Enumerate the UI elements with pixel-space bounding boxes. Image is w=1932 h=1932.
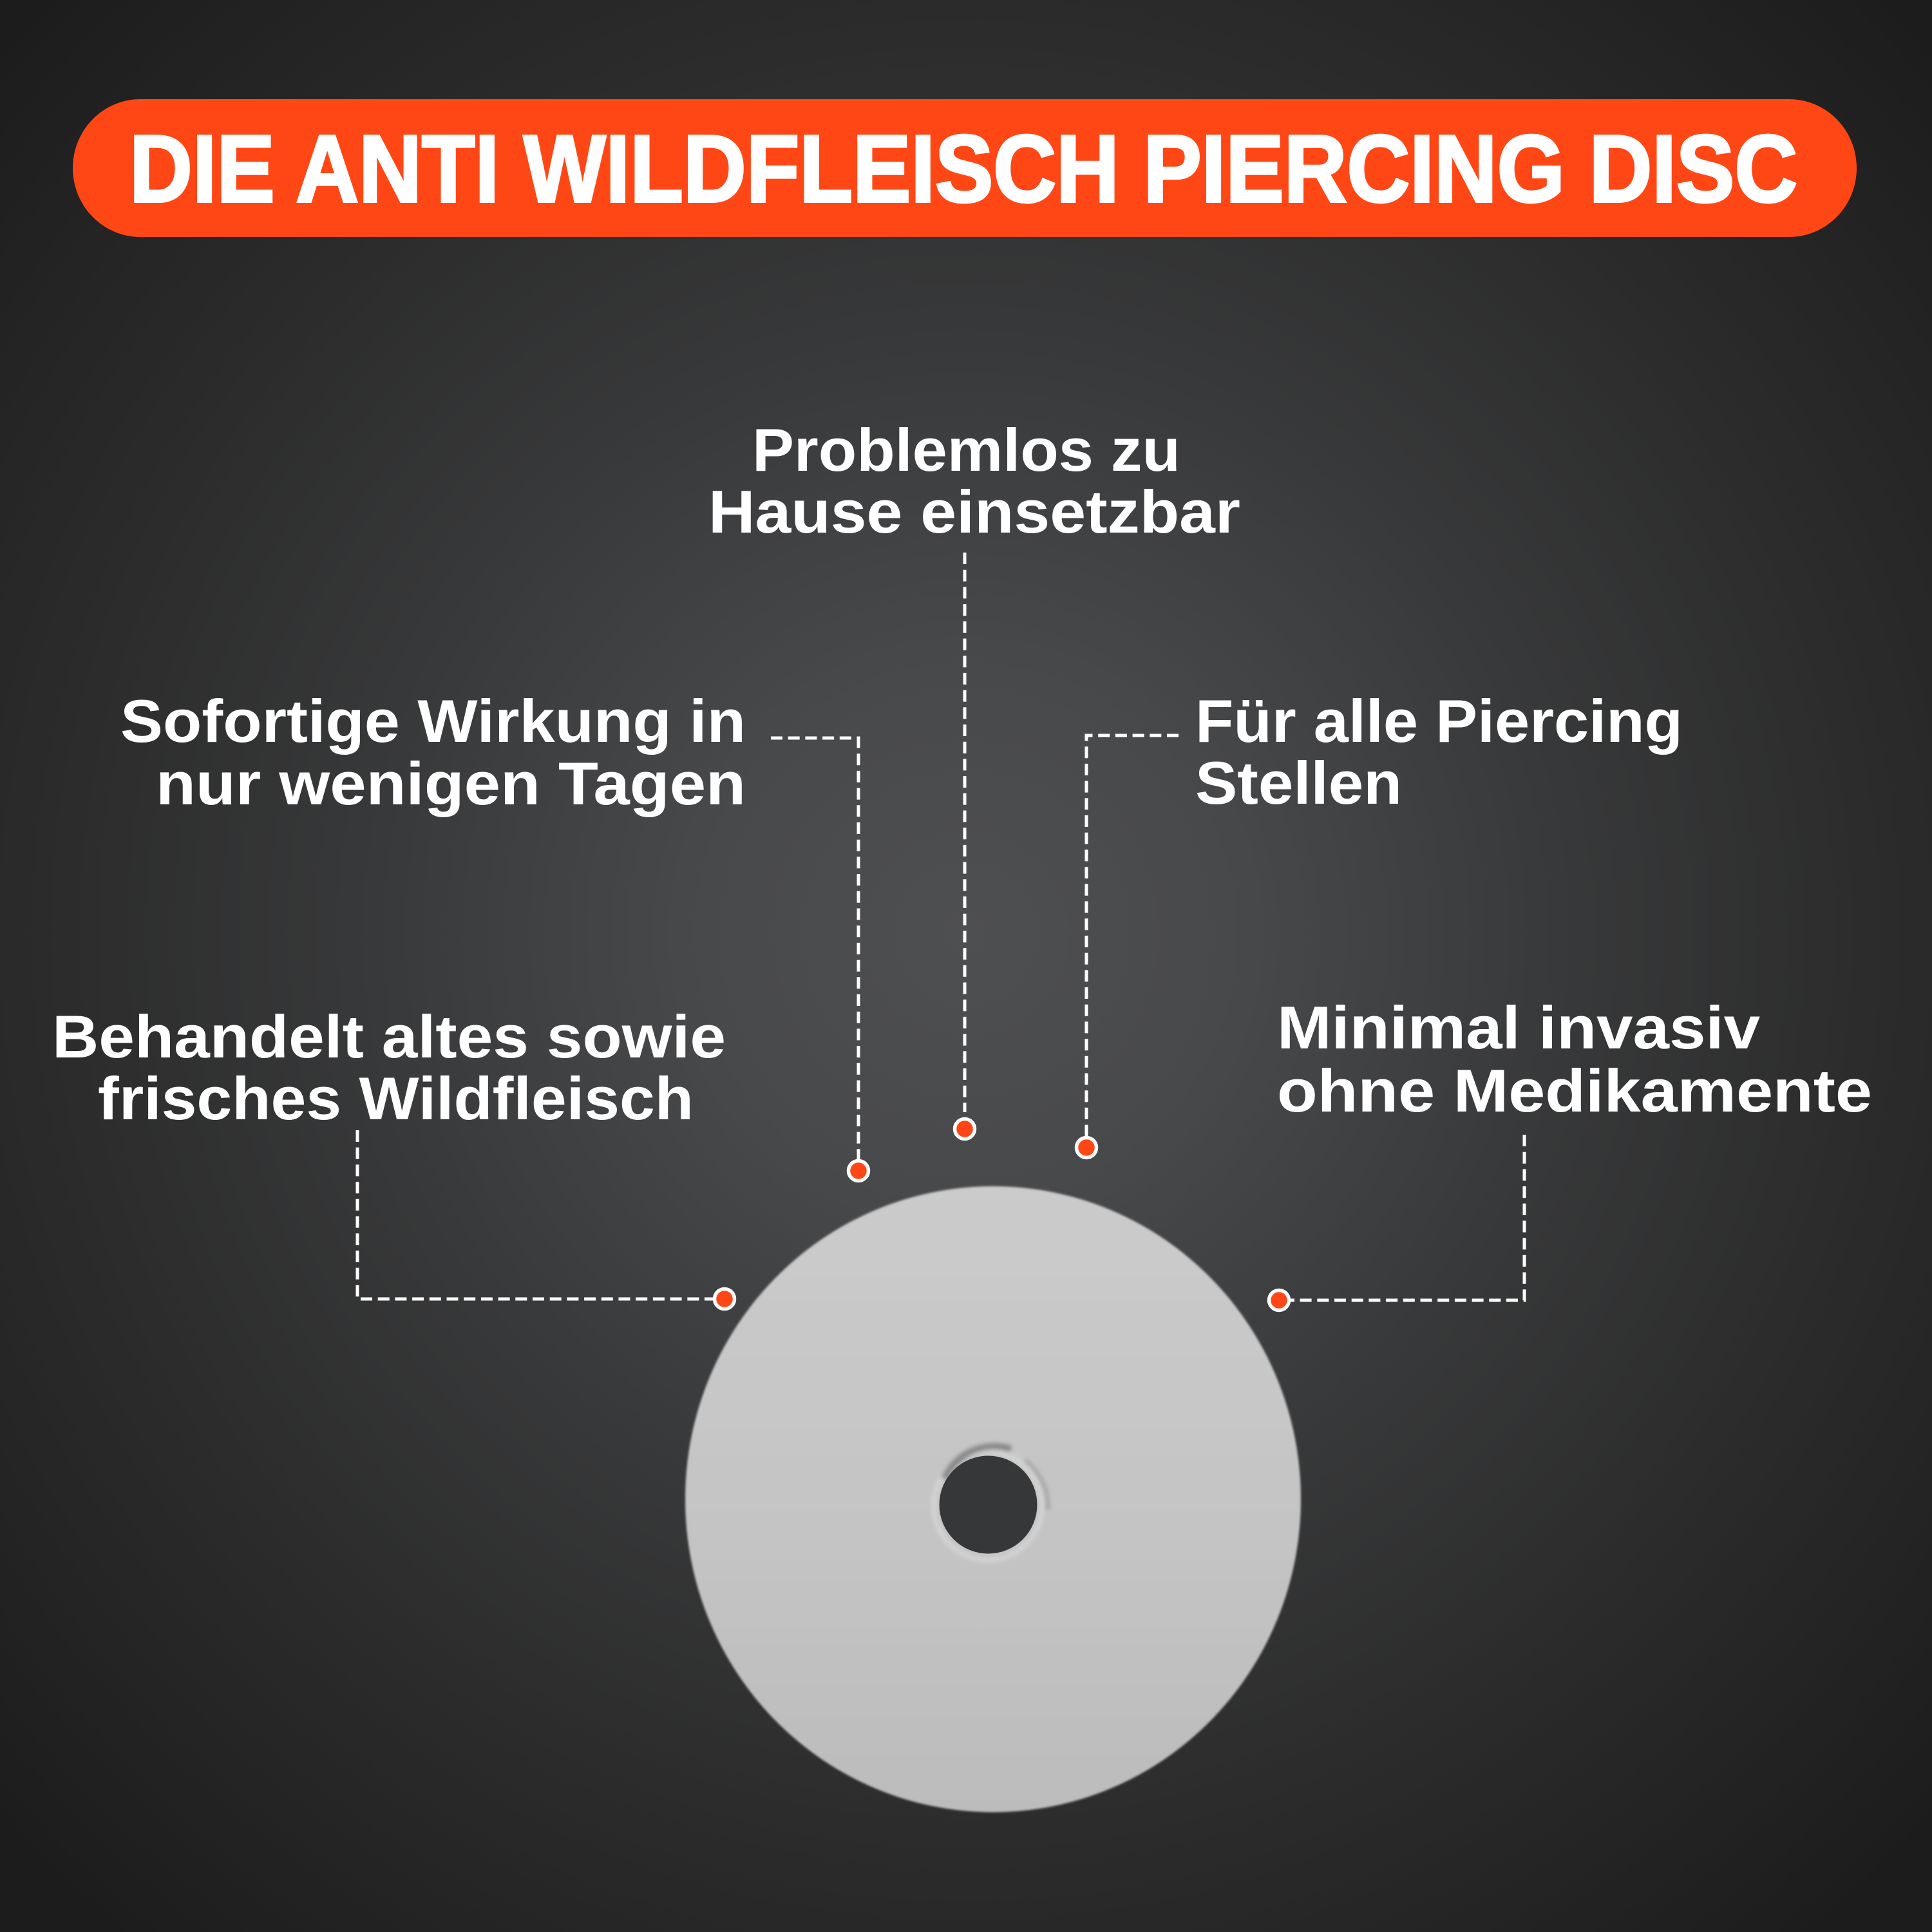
callout: Minimal invasiv ohne Medikamente bbox=[1269, 994, 1872, 1310]
marker dot bbox=[954, 1119, 975, 1139]
dashed connector bbox=[771, 738, 858, 1159]
label line 2: Hause einsetzbar bbox=[708, 478, 1240, 545]
marker dot bbox=[1077, 1137, 1096, 1158]
dashed connector bbox=[1291, 1135, 1524, 1300]
title text: DIE ANTI WILDFLEISCH PIERCING DISC bbox=[129, 116, 1797, 222]
label line 2: frisches Wildfleisch bbox=[98, 1065, 694, 1132]
marker dot bbox=[715, 1289, 734, 1309]
title banner bbox=[73, 99, 1857, 237]
callout: Problemlos zu Hause einsetzbar bbox=[708, 416, 1240, 1139]
product: piercing disc bbox=[685, 1186, 1301, 1812]
callout: Für alle Piercing Stellen bbox=[1077, 687, 1683, 1158]
label line 2: Stellen bbox=[1195, 749, 1402, 817]
marker dot bbox=[849, 1160, 868, 1181]
label line 2: ohne Medikamente bbox=[1277, 1057, 1872, 1124]
label: Problemlos zu bbox=[752, 416, 1180, 484]
disc body bbox=[685, 1186, 1301, 1812]
callout: Sofortige Wirkung bbox=[120, 687, 868, 1181]
label: Minimal invasiv bbox=[1277, 994, 1760, 1061]
dashed connector bbox=[963, 553, 966, 1112]
hole bbox=[939, 1455, 1037, 1553]
marker dot bbox=[1269, 1291, 1289, 1310]
banner pill bbox=[73, 99, 1857, 237]
label line 2: nur wenigen Tagen bbox=[156, 750, 746, 817]
hole rim detail bbox=[934, 1446, 1048, 1560]
callout: Behandelt altes sowie frisches Wildfleisch bbox=[52, 1003, 734, 1309]
dashed connector bbox=[1086, 735, 1179, 1137]
label: Sofortige Wirkung in bbox=[120, 687, 746, 755]
label: Für alle Piercing bbox=[1195, 687, 1683, 755]
label: Behandelt altes sowie bbox=[52, 1003, 726, 1070]
dashed connector bbox=[357, 1130, 713, 1299]
